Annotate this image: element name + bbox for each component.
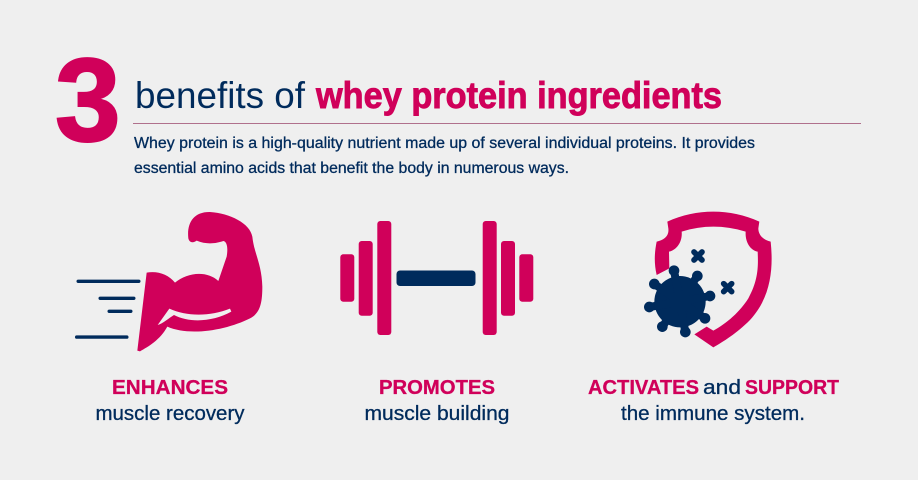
intro text: Whey protein is a high-quality nutrient made up of several individual proteins. It provides (134, 135, 755, 152)
label: activates and support the immune system: SUPPORT (745, 377, 839, 399)
icon: dumbbell (340, 221, 533, 335)
big number 3: 3 (55, 34, 121, 166)
label: activates and support the immune system: and (703, 377, 741, 399)
title: whey protein ingredients (315, 75, 722, 116)
label: promotes muscle building (364, 377, 510, 425)
label: activates and support the immune system: the immune system. (621, 403, 805, 425)
icon: flexed muscle with speed lines (75, 212, 262, 351)
intro text: essential amino acids that benefit the body in numerous ways. (134, 160, 569, 177)
label: enhances muscle recovery: ENHANCES (112, 377, 228, 399)
label: promotes muscle building: PROMOTES (379, 377, 495, 399)
label: activates and support the immune system: ACTIVATES (588, 377, 699, 399)
label: activates and support the immune system (588, 377, 839, 425)
label: promotes muscle building: muscle building (364, 403, 510, 425)
label: enhances muscle recovery: muscle recovery (96, 403, 244, 425)
title (135, 75, 722, 116)
label: enhances muscle recovery (96, 377, 244, 425)
intro text (134, 135, 755, 177)
title: benefits of (135, 75, 306, 116)
icon: shield with virus (644, 212, 772, 347)
